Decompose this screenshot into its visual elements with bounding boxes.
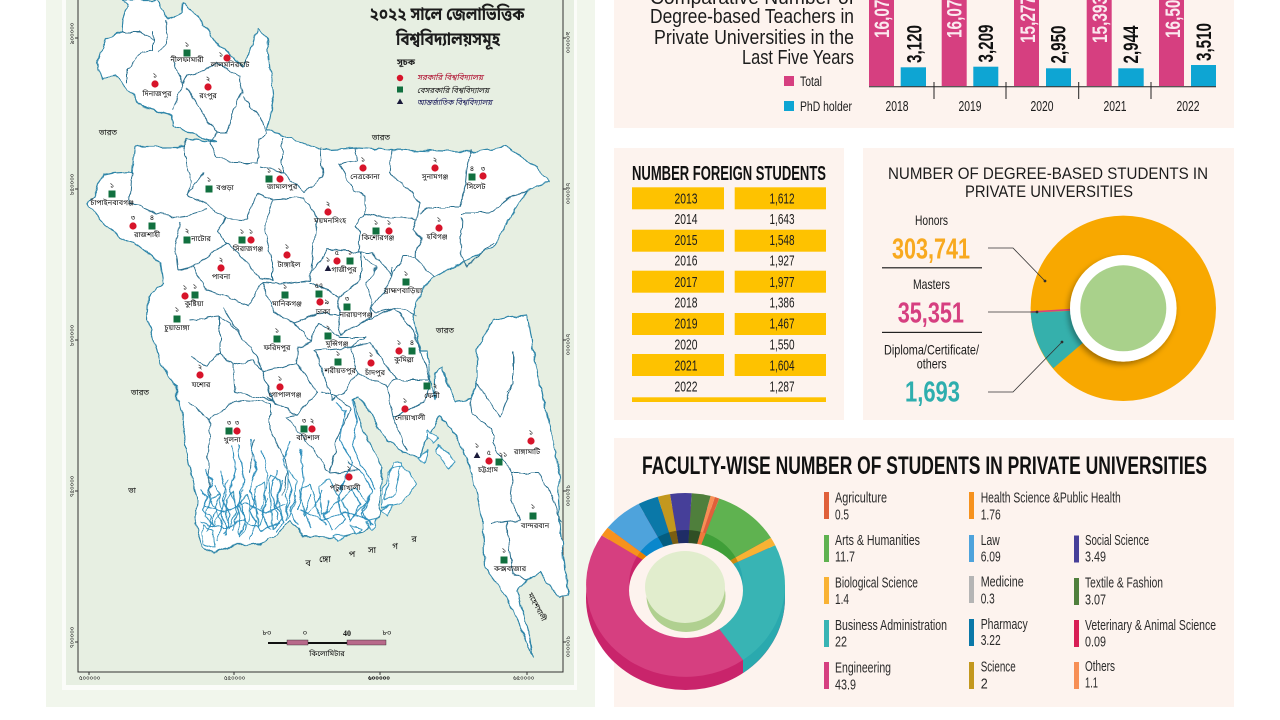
legend: Veterinary and Animal Science: 0.09	[1085, 635, 1106, 651]
bar values PhD: 3,209	[975, 24, 998, 62]
degree stats: Diploma/Certificate/	[884, 341, 979, 357]
university counts above markers: ৩	[481, 165, 485, 174]
university counts above markers: ২১	[499, 451, 507, 460]
district labels: পাবনা	[212, 273, 231, 283]
legend: Textile and Fashion	[1074, 576, 1163, 608]
university counts above markers: ২	[185, 227, 190, 236]
university counts above markers: ১	[529, 429, 533, 438]
district labels: ময়মনসিংহ	[313, 216, 347, 227]
table values: 1,287	[770, 379, 794, 396]
table values: 1,612	[770, 190, 794, 207]
legend: Business Administration	[824, 618, 947, 651]
district labels: বান্দরবান	[520, 522, 550, 532]
legend: Science: Science	[981, 660, 1016, 676]
chart legend: Total	[800, 74, 822, 89]
university counts above markers: ১	[374, 219, 378, 228]
table values: 2020	[674, 337, 698, 354]
legend: Agriculture: 0.5	[835, 507, 849, 523]
district labels: মানিকগঞ্জ	[271, 299, 302, 310]
bars PhD holder	[901, 65, 1216, 86]
university counts above markers: ৩	[345, 295, 349, 304]
delta rivers and islands	[200, 400, 455, 548]
panel: teachers bar chart	[614, 0, 1234, 128]
panel: faculty-wise students	[586, 438, 1234, 707]
district labels: ৮০	[383, 629, 391, 639]
university counts above markers: ৫	[335, 249, 339, 258]
map coordinate labels: ৬৫০০০০	[513, 675, 535, 683]
degree panel heading	[888, 164, 1208, 201]
legend: Medicine	[969, 575, 1024, 607]
legend: Others: 1.1	[1085, 676, 1098, 692]
university counts above markers: ১	[240, 228, 244, 237]
district labels: কিলোমিটার	[308, 649, 345, 660]
university counts above markers: ৪	[470, 165, 474, 174]
table values: 1,927	[770, 253, 794, 270]
district labels: শরীয়তপুর	[323, 366, 356, 377]
panel: foreign students table	[614, 148, 844, 420]
university counts above markers: ২	[433, 382, 438, 391]
map coordinate labels: ৭০০০০০	[69, 626, 77, 648]
district labels: ভারত	[98, 129, 117, 139]
degree stats: 303,741	[892, 233, 970, 265]
map coordinate labels: ৯০০০০০	[69, 22, 77, 44]
university counts above markers: ২	[198, 363, 203, 372]
district labels: ব্রাহ্মণবাড়িয়া	[383, 286, 423, 297]
legend: Business Administration: 22	[835, 635, 847, 651]
year labels: 2018	[886, 99, 908, 115]
legend: Health Science and Public Health: Health Science &Public Health	[981, 491, 1121, 507]
year labels: 2022	[1176, 99, 1200, 115]
table values: 1,467	[770, 316, 794, 333]
legend: Law: Law	[981, 533, 1000, 549]
map coordinate labels: ৭৫০০০০	[69, 475, 77, 497]
university counts above markers: ১	[185, 41, 189, 50]
degree stats: Honors	[915, 212, 948, 228]
degree stats: 35,351	[898, 297, 964, 329]
university counts above markers: ২	[206, 75, 211, 84]
university counts above markers: ১	[403, 397, 407, 406]
year labels: 2019	[958, 99, 982, 115]
legend: Pharmacy	[969, 617, 1028, 649]
university counts above markers: ১	[193, 283, 197, 292]
map title: ২০২২ সালে জেলাভিত্তিক	[370, 4, 525, 28]
university counts above markers: ২	[326, 200, 331, 209]
district labels: রাঙ্গামাটি	[513, 447, 541, 458]
map coordinate labels	[69, 22, 571, 683]
district labels	[89, 55, 550, 660]
year labels	[886, 99, 1200, 115]
university counts above markers: ১	[336, 350, 340, 359]
map coordinate labels: ৬০০০০০	[368, 675, 390, 683]
university counts above markers: ১	[348, 249, 352, 258]
district labels: জামালপুর	[266, 183, 298, 193]
degree stats	[882, 212, 982, 409]
legend: Medicine: Medicine	[981, 575, 1024, 591]
district labels: হবিগঞ্জ	[425, 232, 448, 243]
chart heading: Last Five Years	[742, 47, 854, 69]
university counts above markers: ২	[219, 256, 224, 265]
legend: Science: 2	[981, 676, 988, 692]
university counts above markers: ১	[404, 270, 408, 279]
university counts above markers: ৫	[487, 449, 491, 458]
legend: Engineering: 43.9	[835, 677, 856, 693]
district labels: ভারত	[371, 134, 390, 144]
legend: Social Science: Social Science	[1085, 533, 1149, 549]
map legend	[396, 57, 494, 109]
legend: Arts and Humanities	[824, 533, 920, 566]
public university markers (red circles)	[129, 54, 535, 481]
table values: 2017	[674, 274, 698, 291]
university counts above markers: ১	[249, 228, 253, 237]
district labels: চুয়াডাঙ্গা	[163, 324, 191, 334]
map of Bangladesh: outline and district boundaries	[88, 0, 568, 657]
legend: Pharmacy: 3.22	[981, 633, 1001, 649]
legend: Veterinary and Animal Science: Veterinary & Animal Science	[1085, 618, 1216, 634]
map coordinate labels: ৮৫০০০০	[69, 173, 77, 195]
district labels: সা	[367, 545, 377, 557]
table values: 2016	[674, 253, 698, 270]
leader lines	[988, 248, 1063, 392]
district labels: কক্সবাজার	[493, 565, 527, 575]
bar axis	[869, 82, 1216, 99]
map legend: সূচক	[396, 57, 416, 69]
degree stats: 1,693	[905, 377, 960, 409]
degree stats: others	[917, 355, 947, 371]
panel: degree-based students	[863, 148, 1234, 420]
university counts above markers: ১	[219, 51, 223, 60]
district labels: খুলনা	[224, 436, 241, 446]
university counts above markers: ১	[531, 503, 535, 512]
bar values total	[871, 0, 1185, 43]
legend: Textile and Fashion: 3.07	[1085, 592, 1106, 608]
university counts above markers: ৪	[150, 214, 154, 223]
legend: Biological Science: 1.4	[835, 592, 849, 608]
district labels: ভারত	[435, 327, 454, 337]
table values: 1,548	[770, 232, 794, 249]
map coordinate labels: ৫৫০০০০	[224, 675, 246, 683]
map coordinate labels: ৭৫০০০০	[563, 485, 571, 507]
bar values PhD: 2,950	[1048, 26, 1071, 64]
table values	[674, 190, 794, 396]
district labels: যশোর	[191, 381, 211, 391]
district labels: প	[349, 549, 356, 561]
degree stats: Masters	[913, 276, 950, 292]
year labels: 2020	[1030, 99, 1054, 115]
university counts above markers: ৪	[410, 339, 414, 348]
legend: Engineering	[824, 661, 891, 693]
university counts above markers: ৩	[235, 419, 239, 428]
legend: Law: 6.09	[981, 550, 1001, 566]
legend: Science	[969, 660, 1016, 692]
legend: Agriculture	[824, 491, 887, 523]
year labels: 2021	[1104, 99, 1126, 115]
district labels: ৮০	[263, 629, 271, 639]
map coordinate labels: ৫০০০০০	[79, 675, 101, 683]
university counts above markers: ১	[369, 351, 373, 360]
university counts above markers: ১	[285, 243, 289, 252]
legend: Others: Others	[1085, 659, 1115, 675]
university counts above markers: ১	[175, 306, 179, 315]
table values: 1,977	[770, 274, 794, 291]
university counts above markers: ১	[326, 256, 330, 265]
legend: Social Science: 3.49	[1085, 550, 1106, 566]
district labels: সিরাজগঞ্জ	[232, 244, 263, 255]
table values: 1,643	[770, 211, 794, 228]
legend: Business Administration: Business Administration	[835, 618, 947, 634]
table values: 2014	[674, 211, 698, 228]
university counts above markers: ১	[361, 156, 365, 165]
university counts above markers: ১	[387, 219, 391, 228]
legend: Social Science	[1074, 533, 1149, 566]
district labels: ঙ্গো	[319, 554, 332, 566]
university counts above markers: ২	[433, 156, 438, 165]
map coordinate labels: ৮০০০০০	[563, 334, 571, 356]
legend: Veterinary and Animal Science	[1074, 618, 1216, 651]
district labels: গোপালগঞ্জ	[269, 391, 302, 401]
degree panel heading: PRIVATE UNIVERSITIES	[965, 182, 1133, 201]
table values: 2013	[674, 190, 698, 207]
legend: Agriculture: Agriculture	[835, 491, 887, 507]
bar values PhD: 3,510	[1193, 23, 1216, 61]
legend: Health Science and Public Health	[969, 491, 1121, 523]
university counts above markers: ১	[283, 283, 287, 292]
chart heading	[650, 0, 854, 69]
faculty 3D donut chart	[586, 493, 785, 690]
district labels: সুনামগঞ্জ	[421, 173, 448, 183]
map coordinate labels: ৮০০০০০	[69, 324, 77, 346]
chart legend	[784, 74, 852, 114]
university counts above markers: ১	[267, 167, 271, 176]
map legend: আন্তর্জাতিক বিশ্ববিদ্যালয়	[417, 97, 494, 109]
bar values PhD: 3,120	[904, 25, 927, 63]
district labels: নোয়াখালী	[395, 413, 426, 424]
map coordinate labels: ৯০০০০০	[563, 32, 571, 54]
table values: 2021	[674, 358, 698, 375]
district labels: 40	[343, 629, 351, 638]
district labels: নেত্রকোনা	[350, 173, 381, 183]
district labels: লালমনিরহাট	[210, 60, 250, 71]
district labels: নীলফামারী	[169, 55, 205, 66]
district labels: র	[410, 534, 417, 546]
legend: Textile and Fashion: Textile & Fashion	[1085, 576, 1163, 592]
table values: 2022	[674, 379, 698, 396]
legend: Pharmacy: Pharmacy	[981, 617, 1028, 633]
district labels: নাটোর	[190, 234, 211, 245]
table values: 1,604	[770, 358, 794, 375]
district labels: ফেনী	[424, 391, 441, 402]
district labels: কিশোরগঞ্জ	[361, 233, 395, 244]
map legend: সরকারি বিশ্ববিদ্যালয়	[417, 72, 485, 84]
legend: Others	[1074, 659, 1115, 692]
university counts above markers: ১	[475, 442, 479, 451]
table values: 2015	[674, 232, 698, 249]
map coordinate labels: ৭০০০০০	[563, 636, 571, 658]
table heading: NUMBER FOREIGN STUDENTS	[632, 163, 826, 185]
district labels: ফরিদপুর	[263, 343, 291, 354]
university counts above markers: ৫৭	[315, 282, 323, 291]
degree panel heading: NUMBER OF DEGREE-BASED STUDENTS IN	[888, 164, 1208, 183]
legend: Medicine: 0.3	[981, 591, 995, 607]
table values: 1,550	[770, 337, 794, 354]
chart heading: Degree-based Teachers in	[650, 6, 854, 28]
legend: Biological Science	[824, 576, 918, 608]
map legend: বেসরকারি বিশ্ববিদ্যালয়	[417, 85, 491, 97]
inner wall of donut	[629, 530, 743, 586]
district labels: চাঁপাইনবাবগঞ্জ	[89, 198, 134, 209]
map title	[370, 4, 525, 53]
university counts above markers	[110, 41, 535, 556]
district labels: রংপুর	[198, 92, 217, 102]
table row stripes	[632, 187, 826, 402]
university counts above markers: ১	[275, 327, 279, 336]
university counts above markers: ১	[397, 339, 401, 348]
university counts above markers: ৯	[325, 298, 329, 307]
university counts above markers: ১	[207, 176, 211, 185]
district labels: কুমিল্লা	[393, 355, 415, 366]
district labels: পটুয়াখালী	[330, 483, 361, 494]
university counts above markers: ১	[110, 182, 114, 191]
district labels: গ	[392, 541, 398, 553]
university counts above markers: ১	[183, 284, 187, 293]
district labels: মহেশখালী	[524, 590, 549, 624]
district labels: ০	[303, 629, 307, 639]
district labels: বরিশাল	[295, 433, 320, 444]
district labels: বগুড়া	[215, 184, 235, 194]
university counts above markers: ২	[310, 417, 315, 426]
district labels: নারায়ণগঞ্জ	[339, 311, 373, 321]
district labels: ব	[304, 558, 311, 570]
map title: বিশ্ববিদ্যালয়সমূহ	[395, 29, 501, 53]
district labels: রাজশাহী	[133, 230, 161, 241]
university counts above markers: ৩	[302, 417, 306, 426]
university counts above markers: ১	[278, 167, 282, 176]
table values: 1,386	[770, 295, 794, 312]
scale bar	[268, 640, 386, 645]
university counts above markers: ১	[278, 375, 282, 384]
legend: Health Science and Public Health: 1.76	[981, 507, 1001, 523]
chart legend: PhD holder	[800, 99, 852, 114]
district labels: টাঙ্গাইল	[277, 260, 301, 271]
bar values PhD: 2,944	[1120, 25, 1143, 64]
panel: district map of universities	[46, 0, 595, 707]
university counts above markers: ৩	[131, 214, 135, 223]
district labels: চট্টগ্রাম	[477, 465, 498, 476]
degree donut chart	[1031, 216, 1216, 401]
legend: Engineering: Engineering	[835, 661, 891, 677]
international university markers (triangles)	[325, 265, 480, 458]
university counts above markers: ১	[437, 216, 441, 225]
bar values PhD	[904, 23, 1216, 64]
university counts above markers: ১	[347, 465, 351, 474]
district labels: দিনাজপুর	[142, 89, 172, 100]
table values: 2019	[674, 316, 698, 333]
private university markers (green squares)	[108, 50, 536, 564]
university counts above markers: ১	[502, 547, 506, 556]
district labels: চাঁদপুর	[364, 368, 386, 379]
map coordinate labels: ৮৫০০০০	[563, 183, 571, 205]
legend: Biological Science: Biological Science	[835, 576, 918, 592]
legend: Arts and Humanities: Arts & Humanities	[835, 533, 920, 549]
legend: Arts and Humanities: 11.7	[835, 550, 855, 566]
bars total	[869, 0, 1184, 86]
district labels: কুষ্টিয়া	[184, 299, 204, 310]
district labels: ভা	[127, 487, 137, 497]
university counts above markers: ১	[153, 72, 157, 81]
district labels: ঢাকা	[315, 308, 331, 318]
district labels: গাজীপুর	[331, 265, 357, 276]
legend: Law	[969, 533, 1001, 566]
faculty legend	[824, 491, 1216, 693]
university counts above markers: ৩	[227, 419, 231, 428]
district labels: ভারত	[130, 389, 149, 399]
university counts above markers: ২	[326, 324, 331, 333]
district labels: সিলেট	[466, 182, 486, 193]
district labels: মুন্সিগঞ্জ	[325, 339, 349, 350]
table values: 2018	[674, 295, 698, 312]
chart heading: Private Universities in the	[654, 27, 854, 49]
